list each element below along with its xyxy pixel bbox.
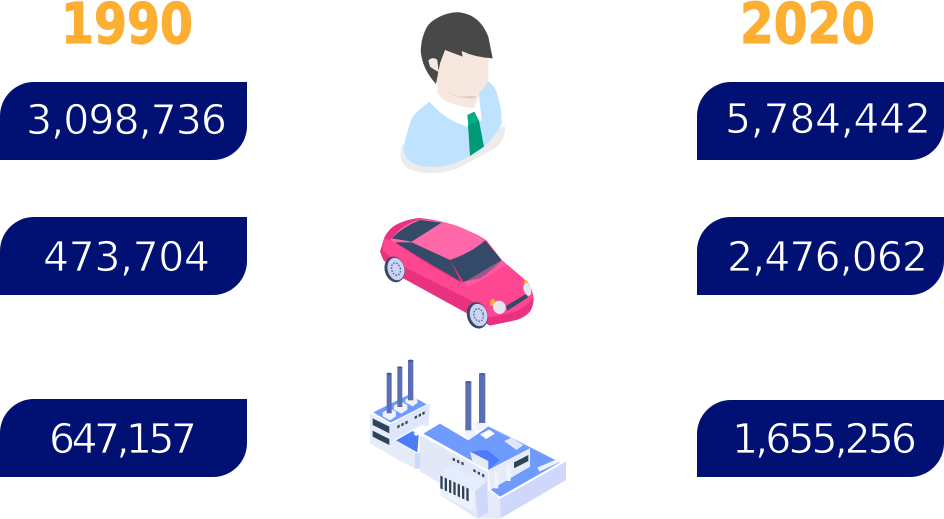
right pill: people 2020: 5,784,442 <box>725 95 931 143</box>
right pill: people 2020 <box>697 82 944 160</box>
right pill: factories 2020 <box>697 400 944 477</box>
left pill: cars 1990 <box>0 217 247 295</box>
right pill: factories 2020: 1,655,256 <box>732 415 917 463</box>
left pill: people 1990: 3,098,736 <box>26 96 227 144</box>
right pill: cars 2020: 2,476,062 <box>727 233 928 281</box>
left pill: people 1990 <box>0 82 247 160</box>
left pill: factories 1990 <box>0 399 247 477</box>
icon: factory <box>370 360 566 518</box>
icon: person <box>400 12 505 173</box>
icon: car <box>380 218 534 331</box>
right pill: cars 2020 <box>697 217 944 295</box>
left pill: cars 1990: 473,704 <box>43 233 210 281</box>
left pill: factories 1990: 647,157 <box>49 415 197 463</box>
